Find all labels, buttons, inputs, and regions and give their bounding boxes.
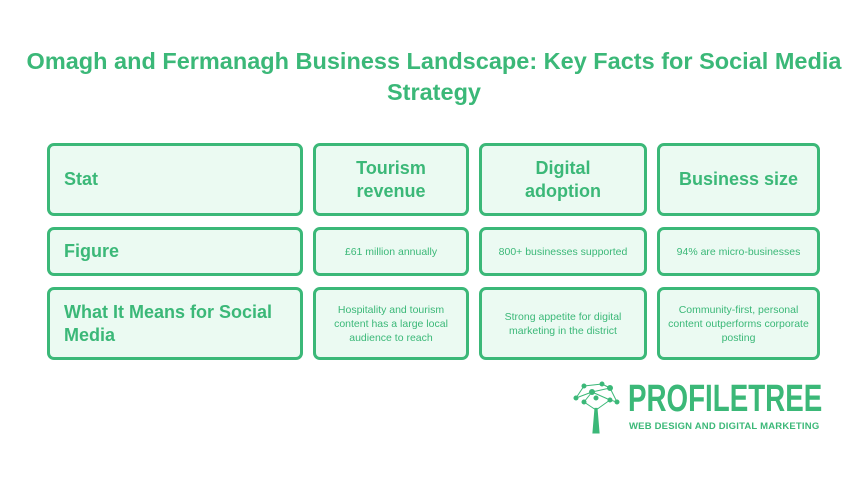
cell: tourism figure: £61 million annually bbox=[345, 246, 437, 258]
logo tagline: WEB DESIGN AND DIGITAL MARKETING bbox=[629, 421, 819, 432]
icon: tree bbox=[574, 382, 620, 434]
header: Tourism revenue: Tourism bbox=[356, 158, 426, 178]
title bbox=[27, 48, 842, 105]
cell: size figure bbox=[657, 227, 820, 276]
cell: tourism figure bbox=[313, 227, 469, 276]
cell: tourism meaning bbox=[313, 287, 469, 360]
cell: size meaning: Community-first, personal content outperforms corporate posting bbox=[668, 304, 809, 344]
cell: digital meaning: Strong appetite for digital marketing in the district bbox=[505, 310, 621, 336]
header: Digital adoption: Digital bbox=[535, 158, 590, 178]
cell: digital figure bbox=[479, 227, 647, 276]
header: Digital adoption bbox=[479, 143, 647, 216]
table bbox=[47, 143, 820, 360]
cell: digital figure: 800+ businesses supported bbox=[499, 246, 627, 258]
header: Tourism revenue bbox=[313, 143, 469, 216]
row label: meaning: Media bbox=[64, 324, 115, 344]
row label: Figure: Figure bbox=[64, 241, 119, 261]
title: Strategy bbox=[387, 79, 481, 105]
header: Tourism revenue: revenue bbox=[356, 180, 426, 200]
row label: meaning bbox=[47, 287, 303, 360]
cell: size figure: 94% are micro-businesses bbox=[677, 246, 800, 258]
row label: Figure bbox=[47, 227, 303, 276]
header: Digital adoption: adoption bbox=[525, 180, 601, 200]
header: Business size bbox=[657, 143, 820, 216]
logo wordmark: PROFILETREE bbox=[628, 378, 822, 420]
header: Business size: Business size bbox=[679, 169, 798, 189]
title: Omagh and Fermanagh Business Landscape: Key Facts for Social Media bbox=[27, 48, 841, 74]
cell: digital meaning bbox=[479, 287, 647, 360]
logo bbox=[574, 378, 822, 434]
row label: meaning: What It Means for Social bbox=[64, 302, 272, 322]
cell: tourism meaning: Hospitality and tourism content has a large local audience to reach bbox=[334, 304, 448, 344]
header: Stat: Stat bbox=[64, 169, 98, 189]
header: Stat bbox=[47, 143, 303, 216]
cell: size meaning bbox=[657, 287, 820, 360]
